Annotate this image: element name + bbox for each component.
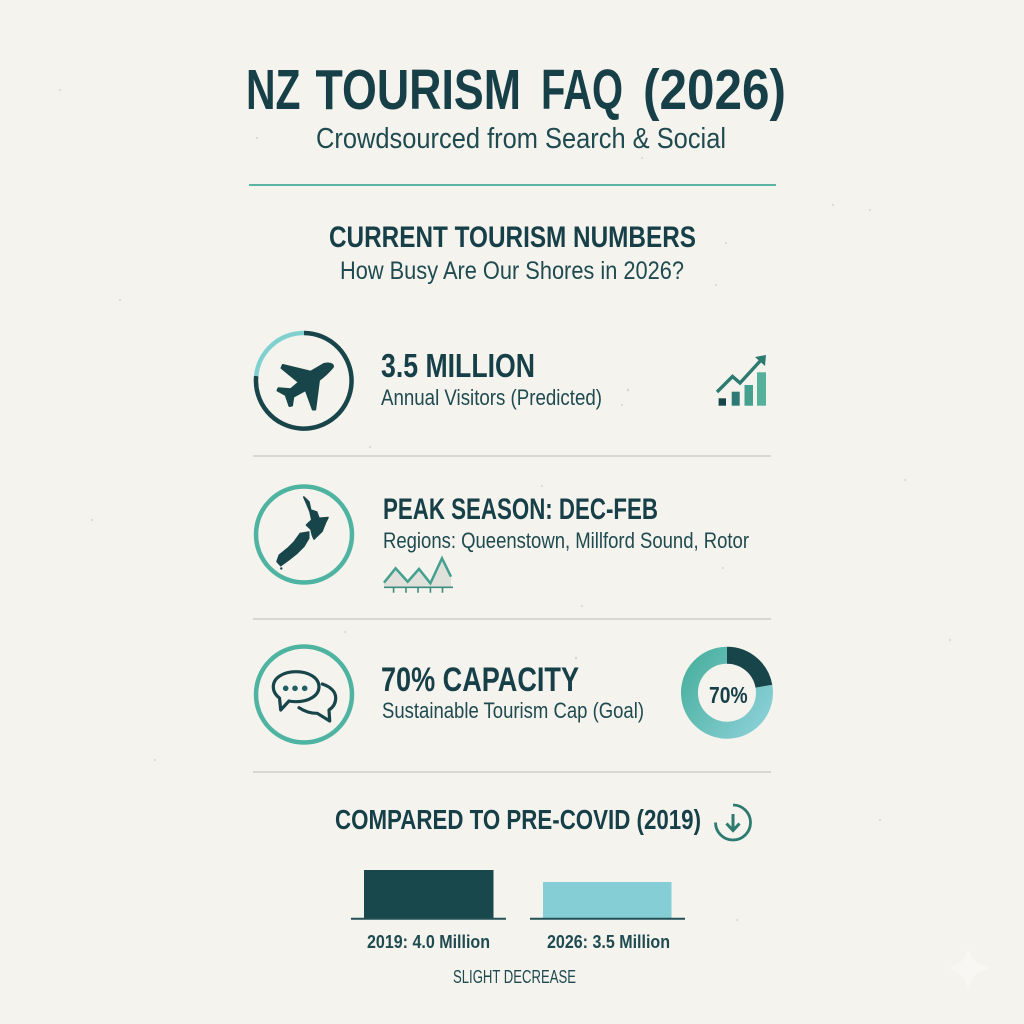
section heading: CURRENT TOURISM NUMBERS: [329, 221, 696, 254]
panel: peak season: [256, 486, 749, 593]
panel: comparison: [335, 804, 750, 987]
subtitle: Crowdsourced from Search & Social: [316, 123, 726, 155]
label: 2019 value: 2019: 4.0 Million: [367, 932, 490, 952]
icon: chat bubbles in ring: [256, 646, 352, 742]
icon: growth chart: [717, 355, 766, 406]
title: FAQ: [541, 58, 623, 122]
bar: 2026: [543, 882, 672, 919]
icon: plane in ring: [256, 333, 352, 429]
label: slight decrease: SLIGHT DECREASE: [453, 967, 576, 987]
label: 2026 value: 2026: 3.5 Million: [547, 932, 670, 952]
stat: 70% capacity: 70% CAPACITY: [381, 661, 579, 699]
icon: New Zealand map in ring: [256, 486, 352, 582]
title: NZ: [246, 58, 300, 122]
section subheading: How Busy Are Our Shores in 2026?: [340, 257, 684, 285]
title: (2026): [643, 58, 786, 122]
stat: peak season: PEAK SEASON: DEC-FEB: [383, 493, 658, 526]
donut chart: 70%: 70%: [709, 682, 748, 708]
icon: down arrow: [716, 805, 750, 840]
title: [246, 58, 786, 122]
panel: capacity: [256, 646, 764, 742]
label: annual visitors: Annual Visitors (Predicted): [381, 385, 602, 410]
stat: 3.5 million: 3.5 MILLION: [381, 347, 535, 384]
title: TOURISM: [316, 58, 521, 122]
icon: seasonal line chart: [384, 558, 453, 593]
heading: compared to pre-covid: COMPARED TO PRE-COVID (2019): [335, 804, 701, 835]
icon: sparkle watermark: [947, 947, 991, 990]
label: regions: Regions: Queenstown, Millford Sound, Rotor: [383, 528, 749, 553]
label: sustainable cap: Sustainable Tourism Cap (Goal): [382, 698, 644, 723]
panel: annual visitors: [256, 333, 766, 429]
bar: 2019: [364, 870, 494, 919]
donut chart: 70%: [689, 655, 764, 730]
